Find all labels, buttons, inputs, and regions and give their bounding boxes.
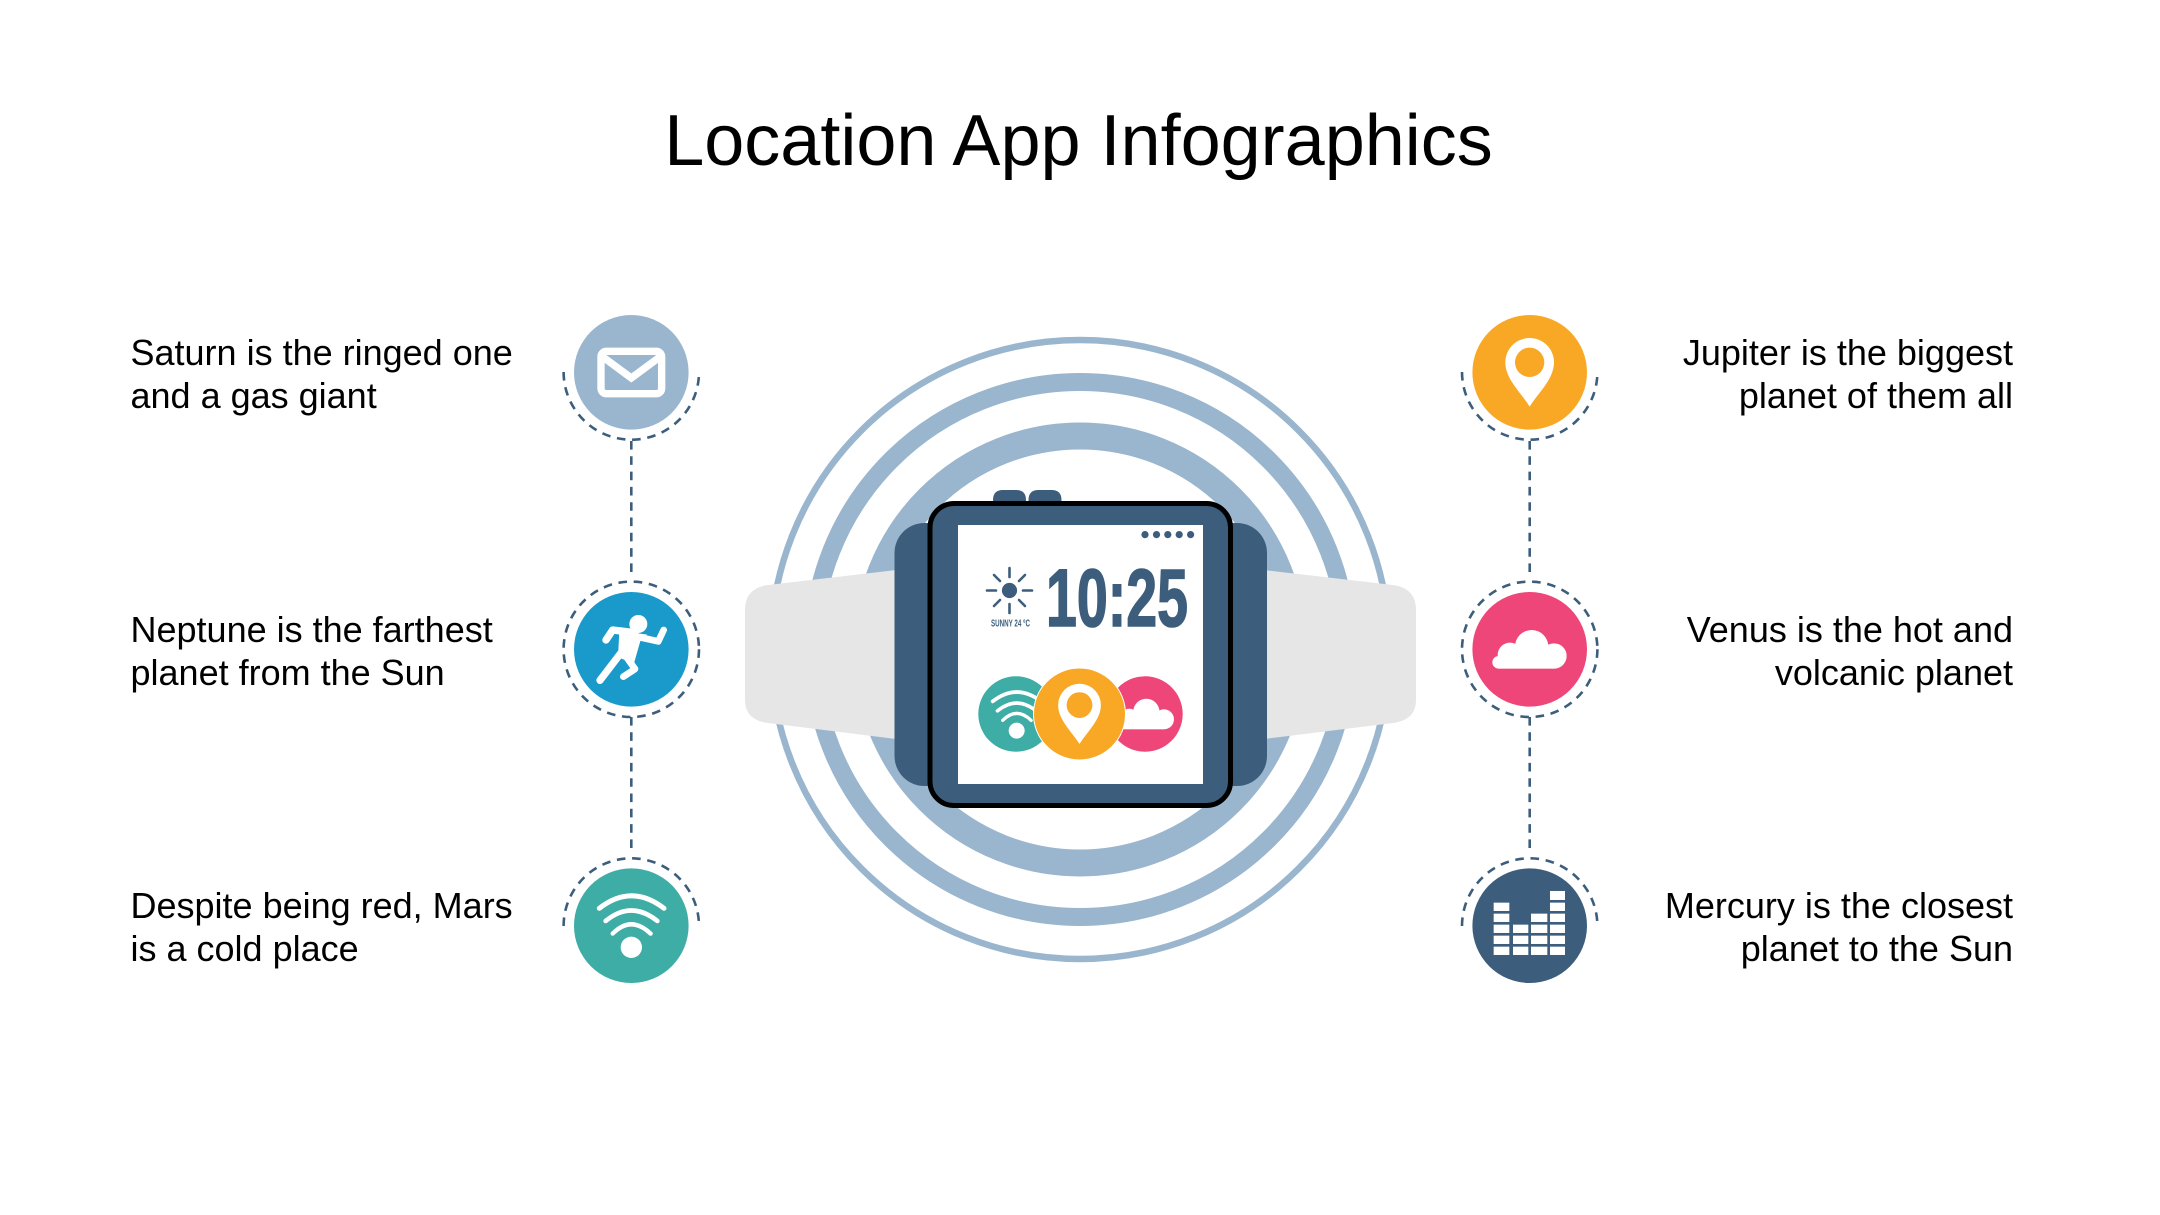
watch body — [930, 504, 1230, 806]
text: Saturn: Saturn is the ringed one — [130, 332, 513, 373]
dashed arc — [1462, 858, 1597, 926]
connector: right column dashed lines — [1528, 441, 1531, 853]
icon: cloud — [1472, 592, 1587, 707]
text: Mars: Despite being red, Mars — [130, 885, 513, 926]
mini icon: wifi — [978, 676, 1054, 752]
watch buttons — [993, 490, 1062, 510]
mini icon: location pin — [1034, 668, 1126, 760]
icon: location pin — [1472, 315, 1587, 430]
icon: wifi — [574, 868, 689, 983]
clock time: 10:25 — [1046, 553, 1188, 644]
item: Neptune — [130, 582, 699, 717]
status dots — [1141, 531, 1194, 538]
text: Venus: volcanic planet — [1775, 652, 2013, 693]
item: Mercury — [1462, 858, 2013, 983]
text: Mercury: planet to the Sun — [1741, 928, 2013, 969]
text: Jupiter: Jupiter is the biggest — [1683, 332, 2013, 373]
text: Neptune: planet from the Sun — [130, 652, 445, 693]
icon: equalizer bars — [1472, 868, 1587, 983]
connector: left column dashed lines — [630, 441, 633, 853]
item: Venus — [1462, 582, 2013, 717]
item: Jupiter — [1462, 315, 2013, 440]
watch strap right — [1264, 570, 1416, 739]
text: Saturn: and a gas giant — [130, 375, 377, 416]
item: Mars — [130, 858, 699, 983]
dashed arc — [564, 372, 699, 440]
dashed arc — [1462, 372, 1597, 440]
title: Location App Infographics — [664, 101, 1493, 181]
mini icon: cloud — [1107, 676, 1183, 752]
panel: central smartwatch illustration — [745, 340, 1416, 959]
text: Venus: Venus is the hot and — [1687, 609, 2013, 650]
text: Mercury: Mercury is the closest — [1665, 885, 2013, 926]
watch strap left — [745, 570, 896, 739]
text: Jupiter: planet of them all — [1739, 375, 2013, 416]
icon: runner — [574, 592, 689, 707]
text: Neptune: Neptune is the farthest — [130, 609, 493, 650]
icon: sun — [987, 568, 1032, 613]
text: Mars: is a cold place — [130, 928, 359, 969]
watch side lugs — [894, 523, 1267, 786]
dashed ring — [564, 582, 699, 717]
weather label: SUNNY 24 °C — [991, 618, 1030, 630]
concentric signal rings — [770, 340, 1390, 959]
dashed ring — [1462, 582, 1597, 717]
icon: envelope — [574, 315, 689, 430]
item: Saturn — [130, 315, 699, 440]
watch screen — [958, 525, 1203, 784]
dashed arc — [564, 858, 699, 926]
